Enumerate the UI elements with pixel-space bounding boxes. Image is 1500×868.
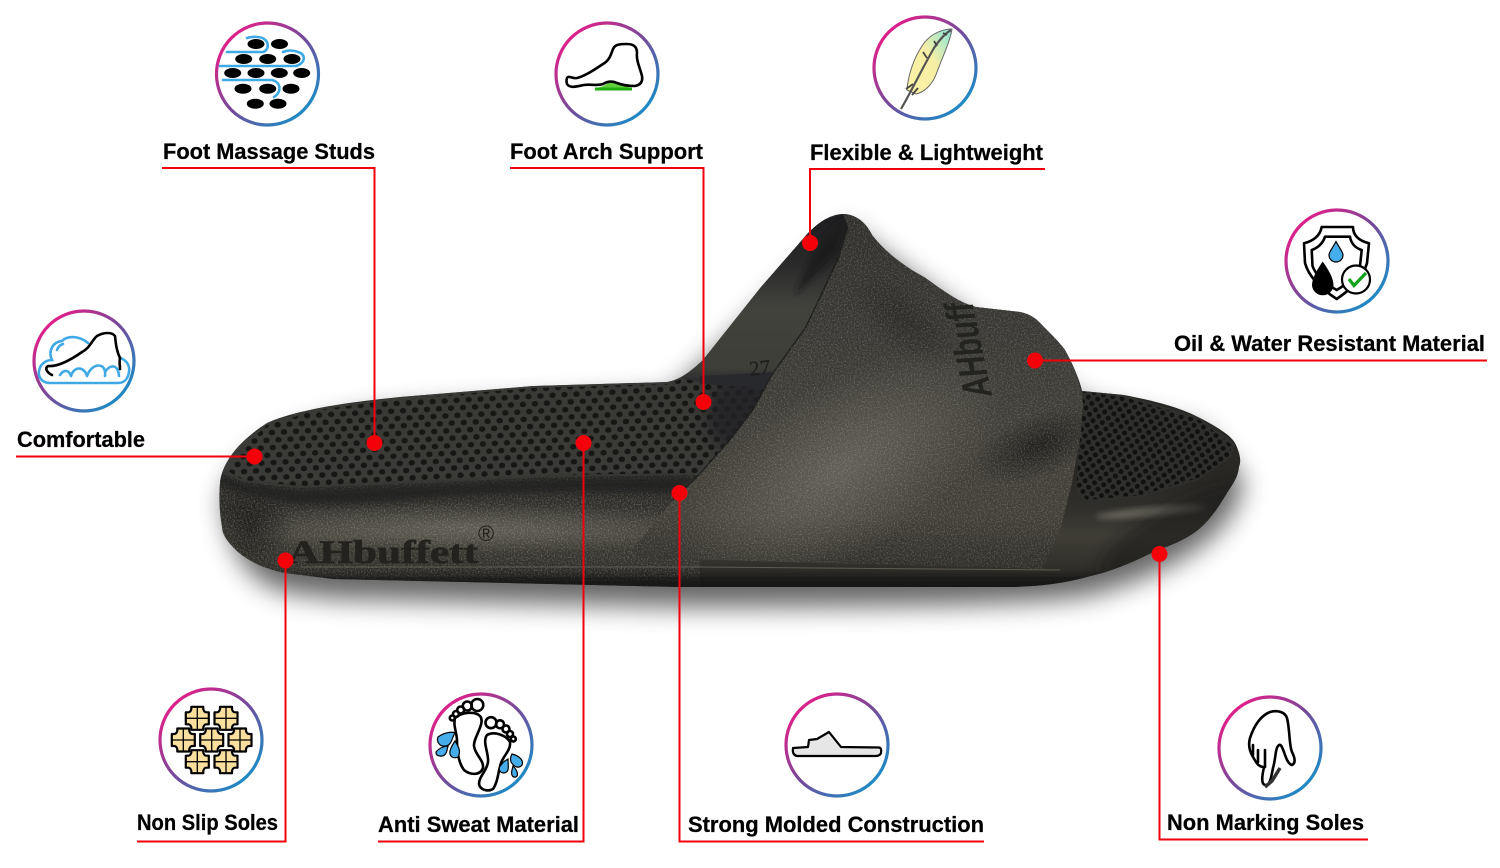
callout: Flexible & Lightweight: Flexible & Lightweight bbox=[810, 140, 1044, 165]
callout: Anti Sweat Material bbox=[378, 435, 592, 842]
icon: non marking soles finger bbox=[1219, 697, 1321, 799]
side logo: AHbuffett bbox=[288, 535, 478, 571]
callout: Strong Molded Construction bbox=[672, 485, 984, 842]
callout: Non Marking Soles: Non Marking Soles bbox=[1167, 810, 1364, 835]
callout: Non Marking Soles bbox=[1152, 546, 1368, 840]
callout: Flexible & Lightweight bbox=[802, 140, 1045, 251]
slide sandal product image bbox=[200, 214, 1272, 643]
callout: Anti Sweat Material: Anti Sweat Material bbox=[378, 812, 579, 837]
strap logo: AHbuff bbox=[937, 296, 1001, 403]
callout: Comfortable bbox=[16, 427, 262, 464]
icon: oil and water resistant shield bbox=[1286, 210, 1388, 312]
callout: Non Slip Soles bbox=[137, 552, 294, 842]
icon: foot arch support bbox=[556, 23, 658, 125]
callout: Foot Arch Support bbox=[510, 139, 712, 410]
icon: non slip soles bbox=[160, 689, 262, 791]
icon: feather bbox=[874, 17, 976, 119]
callout: Foot Arch Support: Foot Arch Support bbox=[510, 139, 704, 164]
registered mark: ® bbox=[478, 521, 494, 546]
size mark: 27 bbox=[748, 355, 771, 381]
callout: Strong Molded Construction: Strong Molded Construction bbox=[688, 812, 984, 837]
callout: Foot Massage Studs: Foot Massage Studs bbox=[163, 139, 375, 164]
icon: foot massage studs bbox=[216, 23, 318, 125]
callout: Foot Massage Studs bbox=[162, 139, 382, 451]
icon: comfortable foot on cloud bbox=[34, 311, 134, 411]
icon: anti sweat feet bbox=[430, 694, 532, 796]
callout: Oil & Water Resistant Material bbox=[1027, 331, 1487, 368]
callout: Non Slip Soles: Non Slip Soles bbox=[137, 810, 278, 835]
icon: strong molded sandal bbox=[786, 694, 888, 796]
callout: Comfortable: Comfortable bbox=[17, 427, 145, 452]
callout: Oil & Water Resistant Material: Oil & Water Resistant Material bbox=[1174, 331, 1485, 356]
